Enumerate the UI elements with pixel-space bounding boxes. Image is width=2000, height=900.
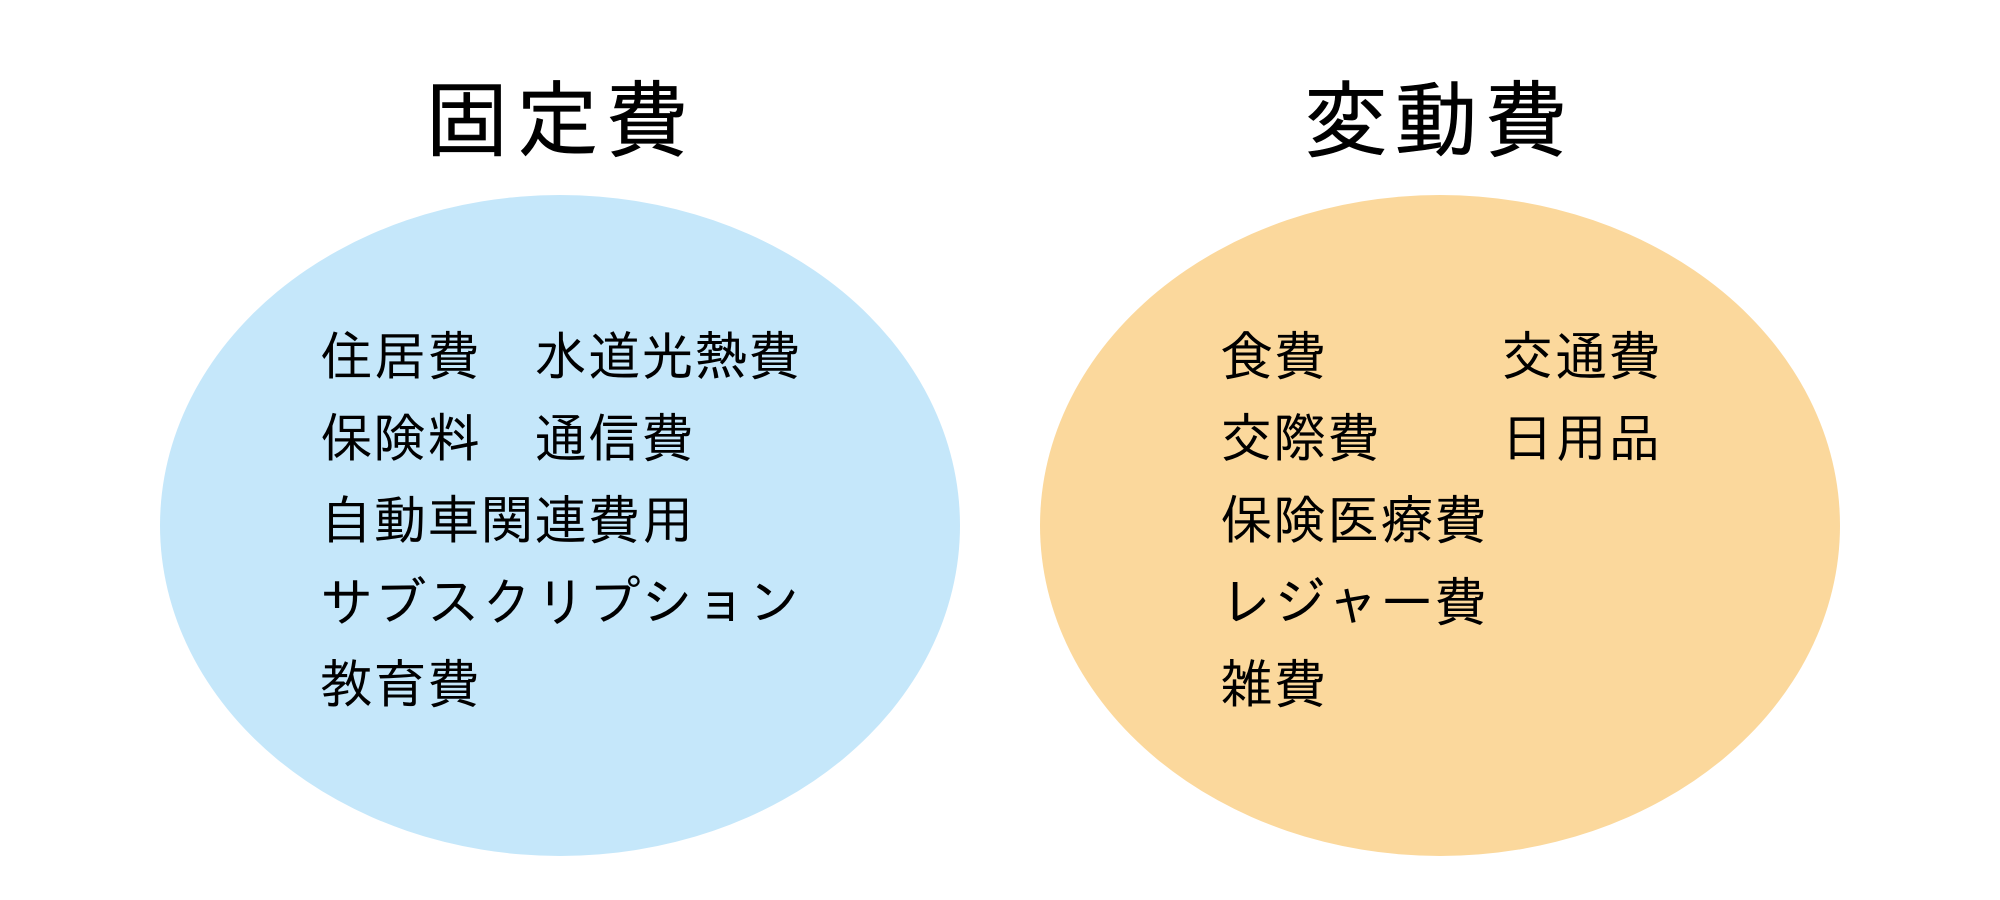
ellipse: fixed costs	[160, 195, 960, 856]
item: insurance: 保険料	[320, 411, 480, 464]
item: education: 教育費	[320, 657, 480, 710]
item: utilities: 水道光熱費	[534, 329, 802, 382]
heading: variable costs: 変動費	[1304, 77, 1574, 161]
panel: fixed costs	[160, 77, 960, 856]
item: miscellaneous: 雑費	[1220, 657, 1327, 710]
item: food: 食費	[1220, 329, 1327, 382]
list: variable cost items	[1220, 329, 1662, 710]
item: housing: 住居費	[320, 329, 480, 382]
item: socializing: 交際費	[1220, 411, 1380, 464]
item: daily goods: 日用品	[1501, 411, 1662, 464]
list: fixed cost items	[320, 329, 802, 710]
item: transport: 交通費	[1501, 329, 1662, 382]
panel: variable costs	[1040, 77, 1840, 856]
heading: fixed costs: 固定費	[425, 77, 695, 161]
item: car costs: 自動車関連費用	[320, 493, 694, 546]
item: leisure: レジャー費	[1220, 575, 1488, 628]
ellipse: variable costs	[1040, 195, 1840, 856]
item: subscriptions: サブスクリプション	[320, 575, 802, 628]
item: communications: 通信費	[534, 411, 694, 464]
item: medical: 保険医療費	[1220, 493, 1488, 546]
